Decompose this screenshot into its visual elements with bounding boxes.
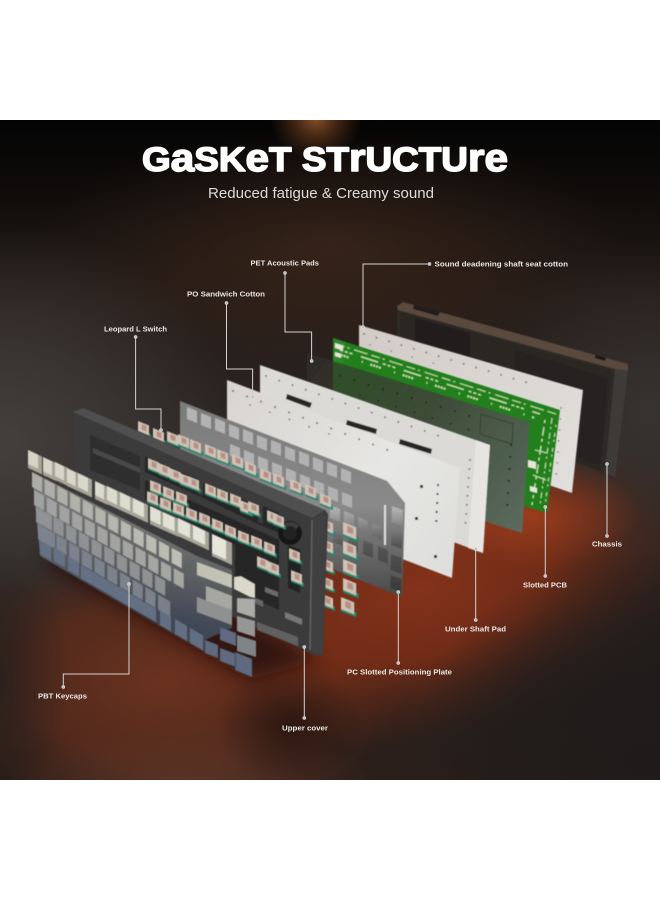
label: Slotted PCB: Slotted PCB — [523, 581, 568, 590]
title: GaSKeT STrUCTUre — [142, 137, 508, 180]
keycap row: function row — [28, 450, 232, 565]
label: PC Slotted Positioning Plate: PC Slotted Positioning Plate — [347, 668, 452, 677]
PBT keycaps — [28, 450, 256, 677]
icon: rotary knob — [278, 521, 302, 545]
component labels — [38, 259, 622, 733]
keycap row: QWERTY row — [34, 490, 232, 611]
label: Under Shaft Pad: Under Shaft Pad — [445, 625, 506, 634]
label: PBT Keycaps: PBT Keycaps — [38, 692, 87, 701]
layer: PET acoustic pads — [307, 353, 530, 533]
layer: PC slotted positioning plate — [180, 401, 405, 597]
leader lines and dots — [63, 264, 607, 718]
keycap row: shift row — [38, 524, 170, 616]
layer: chassis — [397, 302, 628, 477]
leader: upper cover — [304, 648, 305, 716]
layer: sound deadening shaft seat cotton sheet — [359, 325, 583, 493]
leader: under shaft pad — [475, 550, 476, 618]
label: Chassis: Chassis — [592, 540, 622, 549]
label: PO Sandwich Cotton: PO Sandwich Cotton — [187, 290, 265, 299]
leader endpoint dots — [62, 262, 609, 720]
keycap row: home row — [36, 507, 232, 625]
keycap row: number row — [32, 472, 232, 588]
keycap cluster: arrow keys — [205, 627, 252, 677]
infographic: gasket structure exploded keyboard — [0, 120, 660, 780]
keycap row: space row — [40, 540, 203, 650]
leader: slotted PCB — [544, 508, 546, 574]
subtitle: Reduced fatigue & Creamy sound — [208, 186, 434, 202]
label: Sound deadening shaft seat cotton: Sound deadening shaft seat cotton — [434, 260, 568, 269]
background: dark brown gradient with red-orange floor glow — [0, 120, 660, 780]
leader: PO sandwich cotton — [226, 303, 253, 397]
leader: sound deadening — [363, 264, 430, 327]
leader: chassis — [606, 466, 608, 534]
label: Upper cover: Upper cover — [282, 724, 328, 733]
leader: PC slotted plate — [398, 594, 399, 662]
layer: PO sandwich cotton sheet — [227, 380, 460, 578]
leader: PBT keycaps — [63, 584, 129, 687]
Leopard L switches: top row and side stacks — [138, 421, 359, 617]
label: Leopard L Switch: Leopard L Switch — [104, 325, 167, 334]
switches seen through the cover windows — [147, 458, 304, 587]
artwork panel — [0, 120, 660, 780]
layer: upper cover frame with knob — [73, 408, 328, 656]
layer: under shaft pad sheet — [260, 365, 490, 553]
layer: slotted PCB — [333, 338, 560, 513]
label: PET Acoustic Pads: PET Acoustic Pads — [250, 259, 319, 268]
leader: PET acoustic pads — [285, 273, 312, 361]
leader: Leopard L switch — [136, 337, 161, 430]
keycap column: navigation keys — [234, 576, 256, 657]
